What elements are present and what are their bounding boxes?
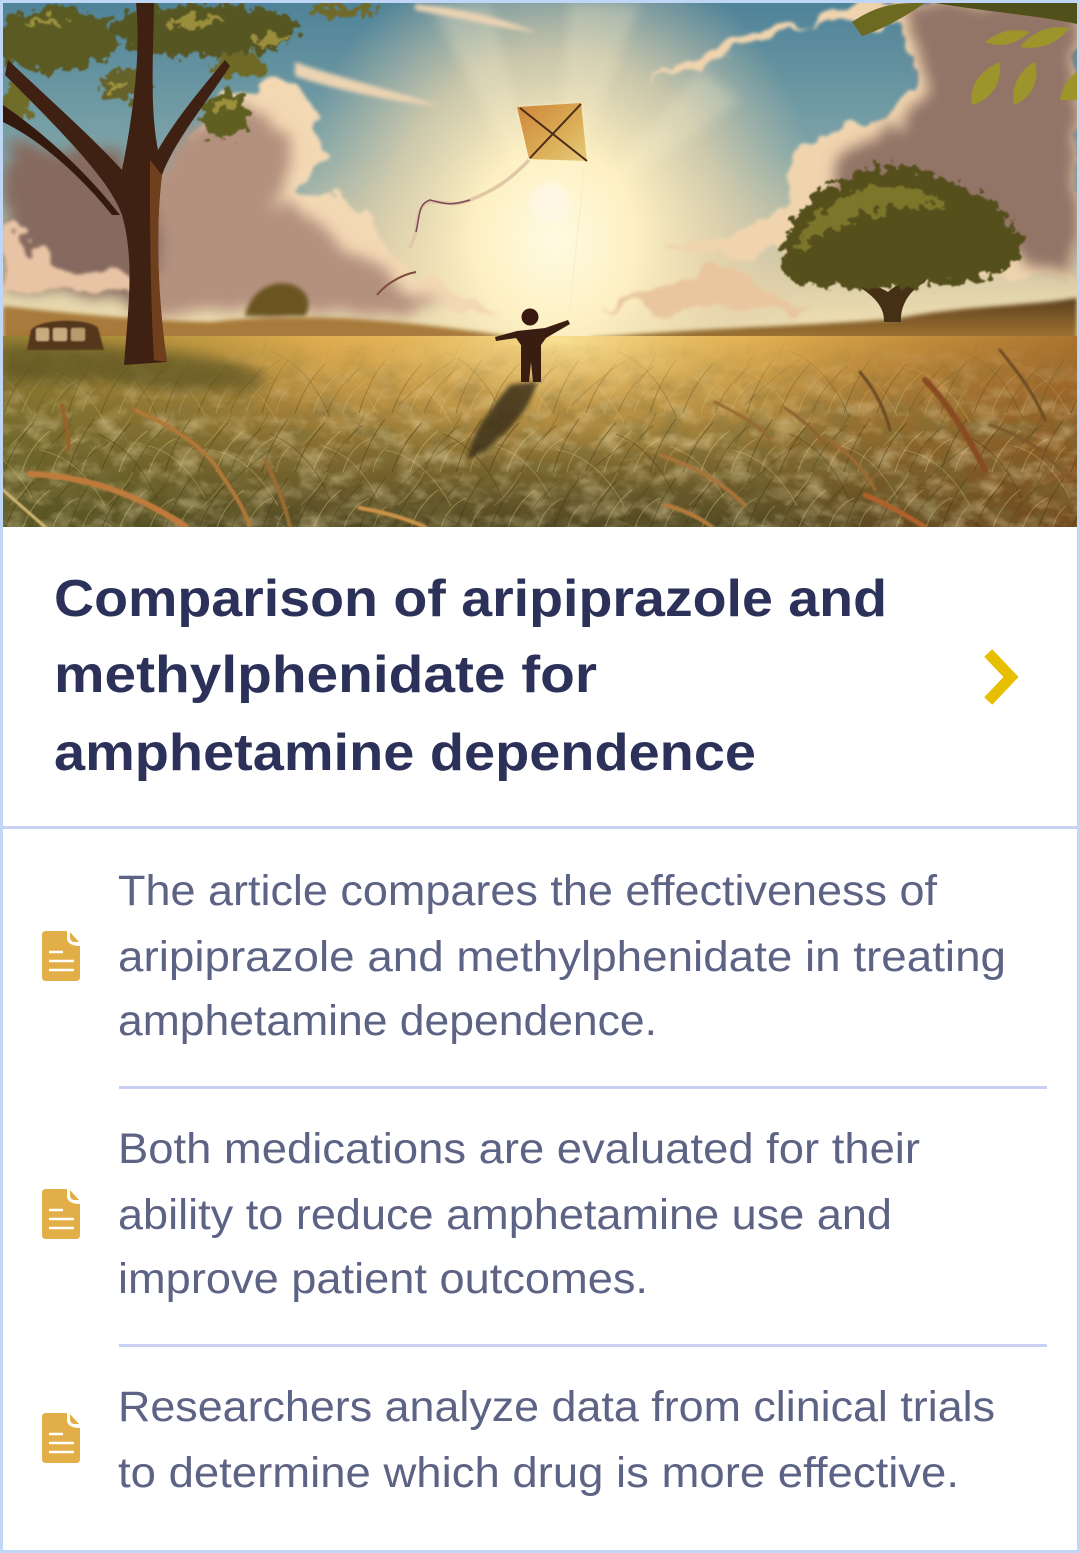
hero illustration: child flying a kite in a golden field [0,3,1077,528]
icon: chevron arrow [992,657,1011,697]
tree: right trunk [860,278,926,322]
title: methylphenidate for [54,646,597,704]
list item 2 [42,1125,920,1303]
canopy highlights [27,17,288,110]
clouds: left shadow [3,108,440,312]
text block 2 [118,1125,920,1303]
clouds: right mass [655,3,1077,280]
text block 1 [118,867,1006,1045]
list item 1 [42,867,1006,1045]
text block 3: to determine which drug is more effective. [118,1449,959,1497]
clouds: left low band [3,222,132,296]
kite tail and string [376,158,582,296]
kite [517,103,587,161]
dark grass under left tree [3,345,266,392]
title: Comparison of aripiprazole and [54,570,887,628]
icon: document [42,1189,80,1239]
list item 3 [42,1383,995,1497]
child silhouette [468,308,570,460]
distant hills [3,295,1077,336]
title: amphetamine dependence [54,724,756,782]
text block 3: Researchers analyze data from clinical trials [118,1383,995,1431]
distant bush [245,283,309,316]
foreground wheat stalks [3,350,1060,527]
tree: left [3,3,230,365]
header divider [3,826,1077,829]
text block 2: improve patient outcomes. [118,1255,648,1303]
icon: document [42,1413,80,1463]
clouds: left mass [150,85,505,310]
icon: document [42,931,80,981]
clouds: low right [600,266,810,312]
text block 3 [118,1383,995,1497]
clouds: right shadow [824,3,1077,275]
leaves: top right [852,3,1077,105]
sky [3,3,1077,343]
text block 1: The article compares the effectiveness of [118,867,938,915]
wheat field [3,336,1077,528]
text block 2: ability to reduce amphetamine use and [118,1191,892,1239]
old car [27,321,104,350]
text block 1: aripiprazole and methylphenidate in treating [118,933,1006,981]
text block 2: Both medications are evaluated for their [118,1125,920,1173]
clouds: wisps upper [295,4,537,106]
title [54,570,887,782]
tree: right canopy [782,165,1022,288]
tree canopy: left, behind trunk [0,4,379,139]
text block 1: amphetamine dependence. [118,997,657,1045]
